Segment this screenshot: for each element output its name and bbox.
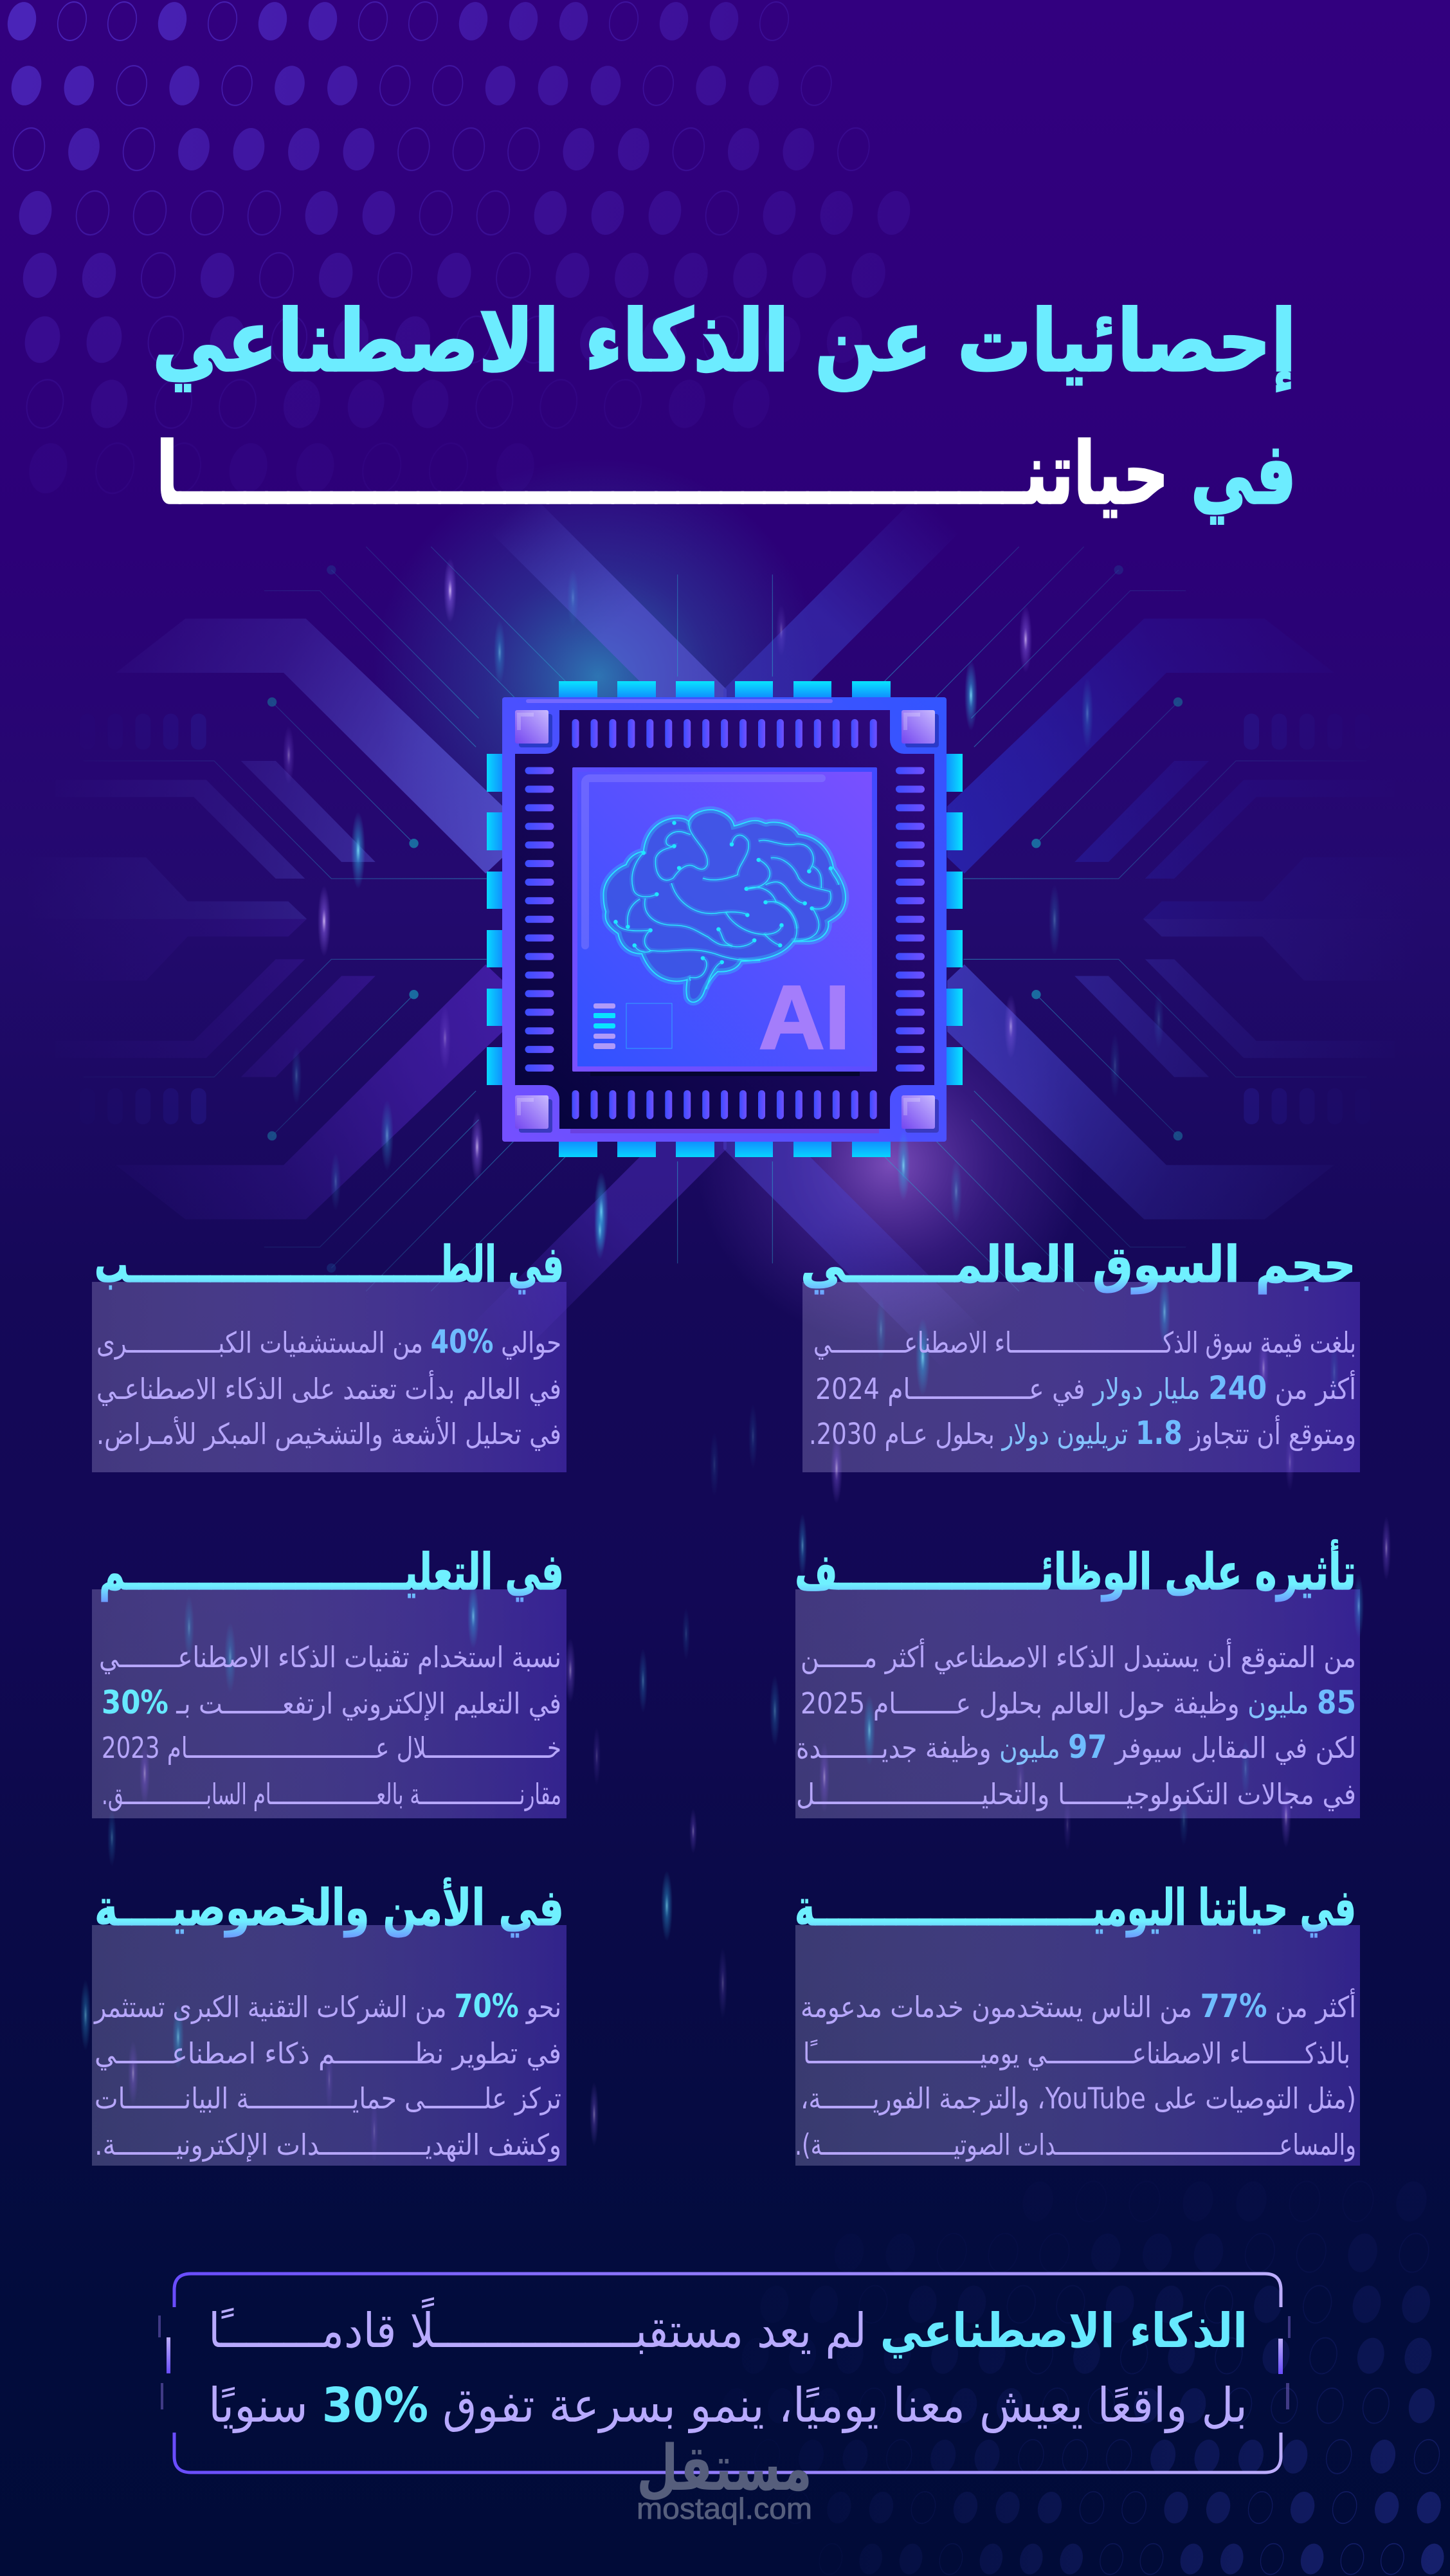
text: daily life: (مثل التوصيات على YouTube، والترجمة الفوريـــــــة، [801, 2081, 1356, 2116]
watermark [637, 2432, 812, 2525]
title [152, 292, 1296, 524]
text: security: في تطوير نظــــــــــم ذكاء اصطناعـــــــي [95, 2036, 561, 2070]
card: jobs [795, 1589, 1360, 1818]
text: market size [801, 1236, 1356, 1452]
text: security: وكشف التهديــــــــــــــدات الإلكترونيــــــــة. [95, 2128, 561, 2162]
card: medicine [92, 1282, 566, 1472]
text: security [93, 1878, 564, 2162]
corner pads [515, 710, 939, 1133]
stat cards [92, 1282, 1360, 2166]
text: security: في الأمن والخصوصيــــة [95, 1878, 564, 1937]
text: medicine [95, 1236, 564, 1452]
text: security: نحو ⁦70%⁩ من الشركات التقنية الكبرى تستثمر [93, 1987, 561, 2025]
chip dark inset [515, 710, 934, 1129]
text: education: في التعليم الإلكتروني ارتفعــــــــت بـ ⁦30%⁩ [102, 1684, 561, 1721]
text: medicine: في العالم بدأت تعتمد على الذكاء الاصطناعـي [96, 1370, 561, 1406]
small screen indicators [594, 1003, 672, 1049]
dotted pattern top left [6, 2, 912, 493]
text: jobs: من المتوقع أن يستبدل الذكاء الاصطناعي أكثر مــــــن [801, 1638, 1356, 1674]
chip pins [487, 681, 963, 1157]
text: education: نسبة استخدام تقنيات الذكاء الاصطناعــــــــي [99, 1640, 561, 1674]
text: medicine: في تحليل الأشعة والتشخيص المبكر للأمـراض. [96, 1416, 561, 1452]
title: إحصائيات عن الذكاء الاصطناعي [152, 292, 1296, 392]
text: education: في التعليـــــــــــــــــــــــم [99, 1544, 564, 1602]
light particles [80, 558, 1391, 2163]
text: jobs: لكن في المقابل سيوفر 97 مليون وظيفة جديــــــــدة [796, 1728, 1356, 1766]
text: jobs: في مجالات التكنولوجيــــــــا والتحليــــــــــــــــــــــل [796, 1777, 1356, 1812]
card: security [92, 1925, 566, 2166]
chip slots [525, 719, 925, 1119]
footer statement [208, 2297, 1247, 2433]
text: jobs: 85 مليون وظيفة حول العالم بحلول عــــــــام 2025 [801, 1684, 1356, 1721]
text: daily life [795, 1879, 1356, 2162]
chip body [502, 697, 947, 1142]
card: education [92, 1589, 566, 1818]
text: education [99, 1544, 564, 1811]
icon: glowing brain [603, 810, 846, 1002]
text: medicine: حوالي ⁦40%⁩ من المستشفيات الكبـــــــــــــرى [96, 1323, 561, 1360]
footer frame [158, 2274, 1291, 2472]
text: education: خــــــــــــــــــلال عــــــــــــــــــــــــــــام 2023 [102, 1731, 561, 1765]
text: market size: حجم السوق العالمـــــــي [801, 1236, 1356, 1294]
text: daily life: أكثر من ⁦77%⁩ من الناس يستخدمون خدمات مدعومة [801, 1987, 1356, 2025]
dotted pattern bottom right [720, 2181, 1445, 2575]
chip screen [572, 767, 877, 1076]
watermark: مستقل [637, 2432, 812, 2505]
text: medicine: في الطـــــــــــــــــــــــــــب [95, 1236, 564, 1294]
text: jobs [795, 1539, 1356, 1812]
AI label: AI [759, 967, 850, 1068]
card: daily life [795, 1925, 1360, 2166]
watermark: mostaql.com [637, 2492, 812, 2525]
footer statement: بل واقعًا يعيش معنا يوميًا، ينمو بسرعة تفوق ⁦30%⁩ سنويًا [208, 2378, 1247, 2433]
text: daily life: بالذكــــــــاء الاصطناعــــــــــــي يوميــــــــــــــــــــــــًا [803, 2036, 1350, 2070]
text: market size: ومتوقع أن تتجاوز 1.8 تريليون دولار بحلول عـام 2030. [809, 1414, 1356, 1452]
glow behind chip [373, 458, 1083, 1344]
text: security: تركز علــــــــى حمايــــــــــــــة البيانــــــــات [95, 2081, 561, 2115]
footer statement: الذكاء الاصطناعي لم يعد مستقبــــــــــــــــلًا قادمــــــــًا [208, 2297, 1247, 2359]
text: education: مقارنـــــــــــــــــة بالعــــــــــــــــــام السابــــــــــــــق. [102, 1777, 561, 1811]
circuit pattern around chip [28, 547, 1422, 1291]
chip illustration [487, 681, 963, 1157]
card: market size [802, 1282, 1360, 1472]
text: market size: أكثر من 240 مليار دولار في عــــــــــــــــام 2024 [815, 1369, 1356, 1407]
diagonal light bands [412, 454, 1038, 1384]
